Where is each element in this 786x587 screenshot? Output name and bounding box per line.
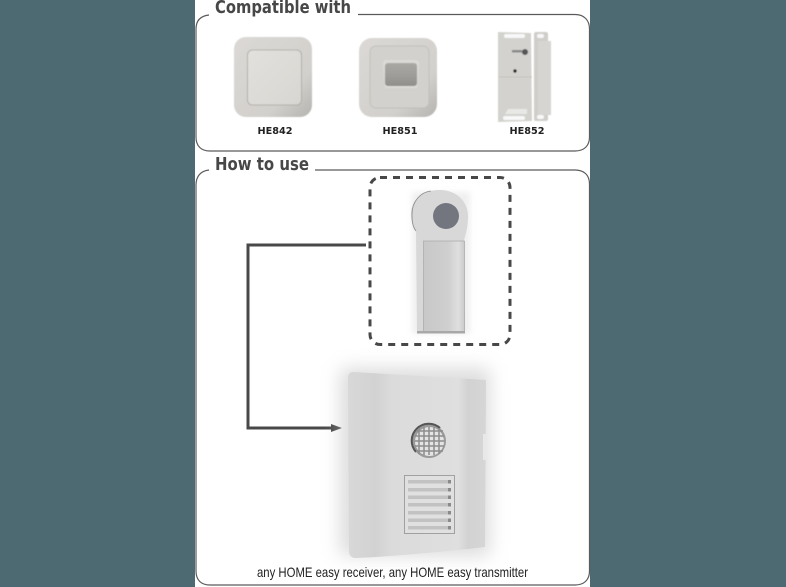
caption: any HOME easy receiver, any HOME easy transmitter	[257, 564, 528, 580]
product: HE851 motion sensor	[359, 38, 437, 117]
icon: doorbell receiver	[340, 368, 490, 558]
panel outline: compatible with	[196, 14, 590, 151]
label: HE851: HE851	[382, 126, 418, 137]
heading: how to use: How to use	[215, 154, 309, 175]
dashed selection frame	[370, 178, 510, 344]
label: HE852: HE852	[510, 126, 545, 137]
white page column	[195, 0, 590, 587]
icon: doorbell transmitter	[411, 190, 470, 334]
speaker grille	[404, 476, 454, 534]
arrow: transmitter to receiver	[248, 245, 366, 432]
label: HE842: HE842	[258, 126, 293, 137]
product: HE852 door contact	[498, 32, 551, 122]
product: HE842 switch	[234, 37, 312, 117]
panel: compatible with	[196, 0, 590, 151]
lens	[412, 424, 446, 458]
panel: how to use	[196, 154, 590, 585]
panel outline: how to use	[196, 170, 590, 585]
